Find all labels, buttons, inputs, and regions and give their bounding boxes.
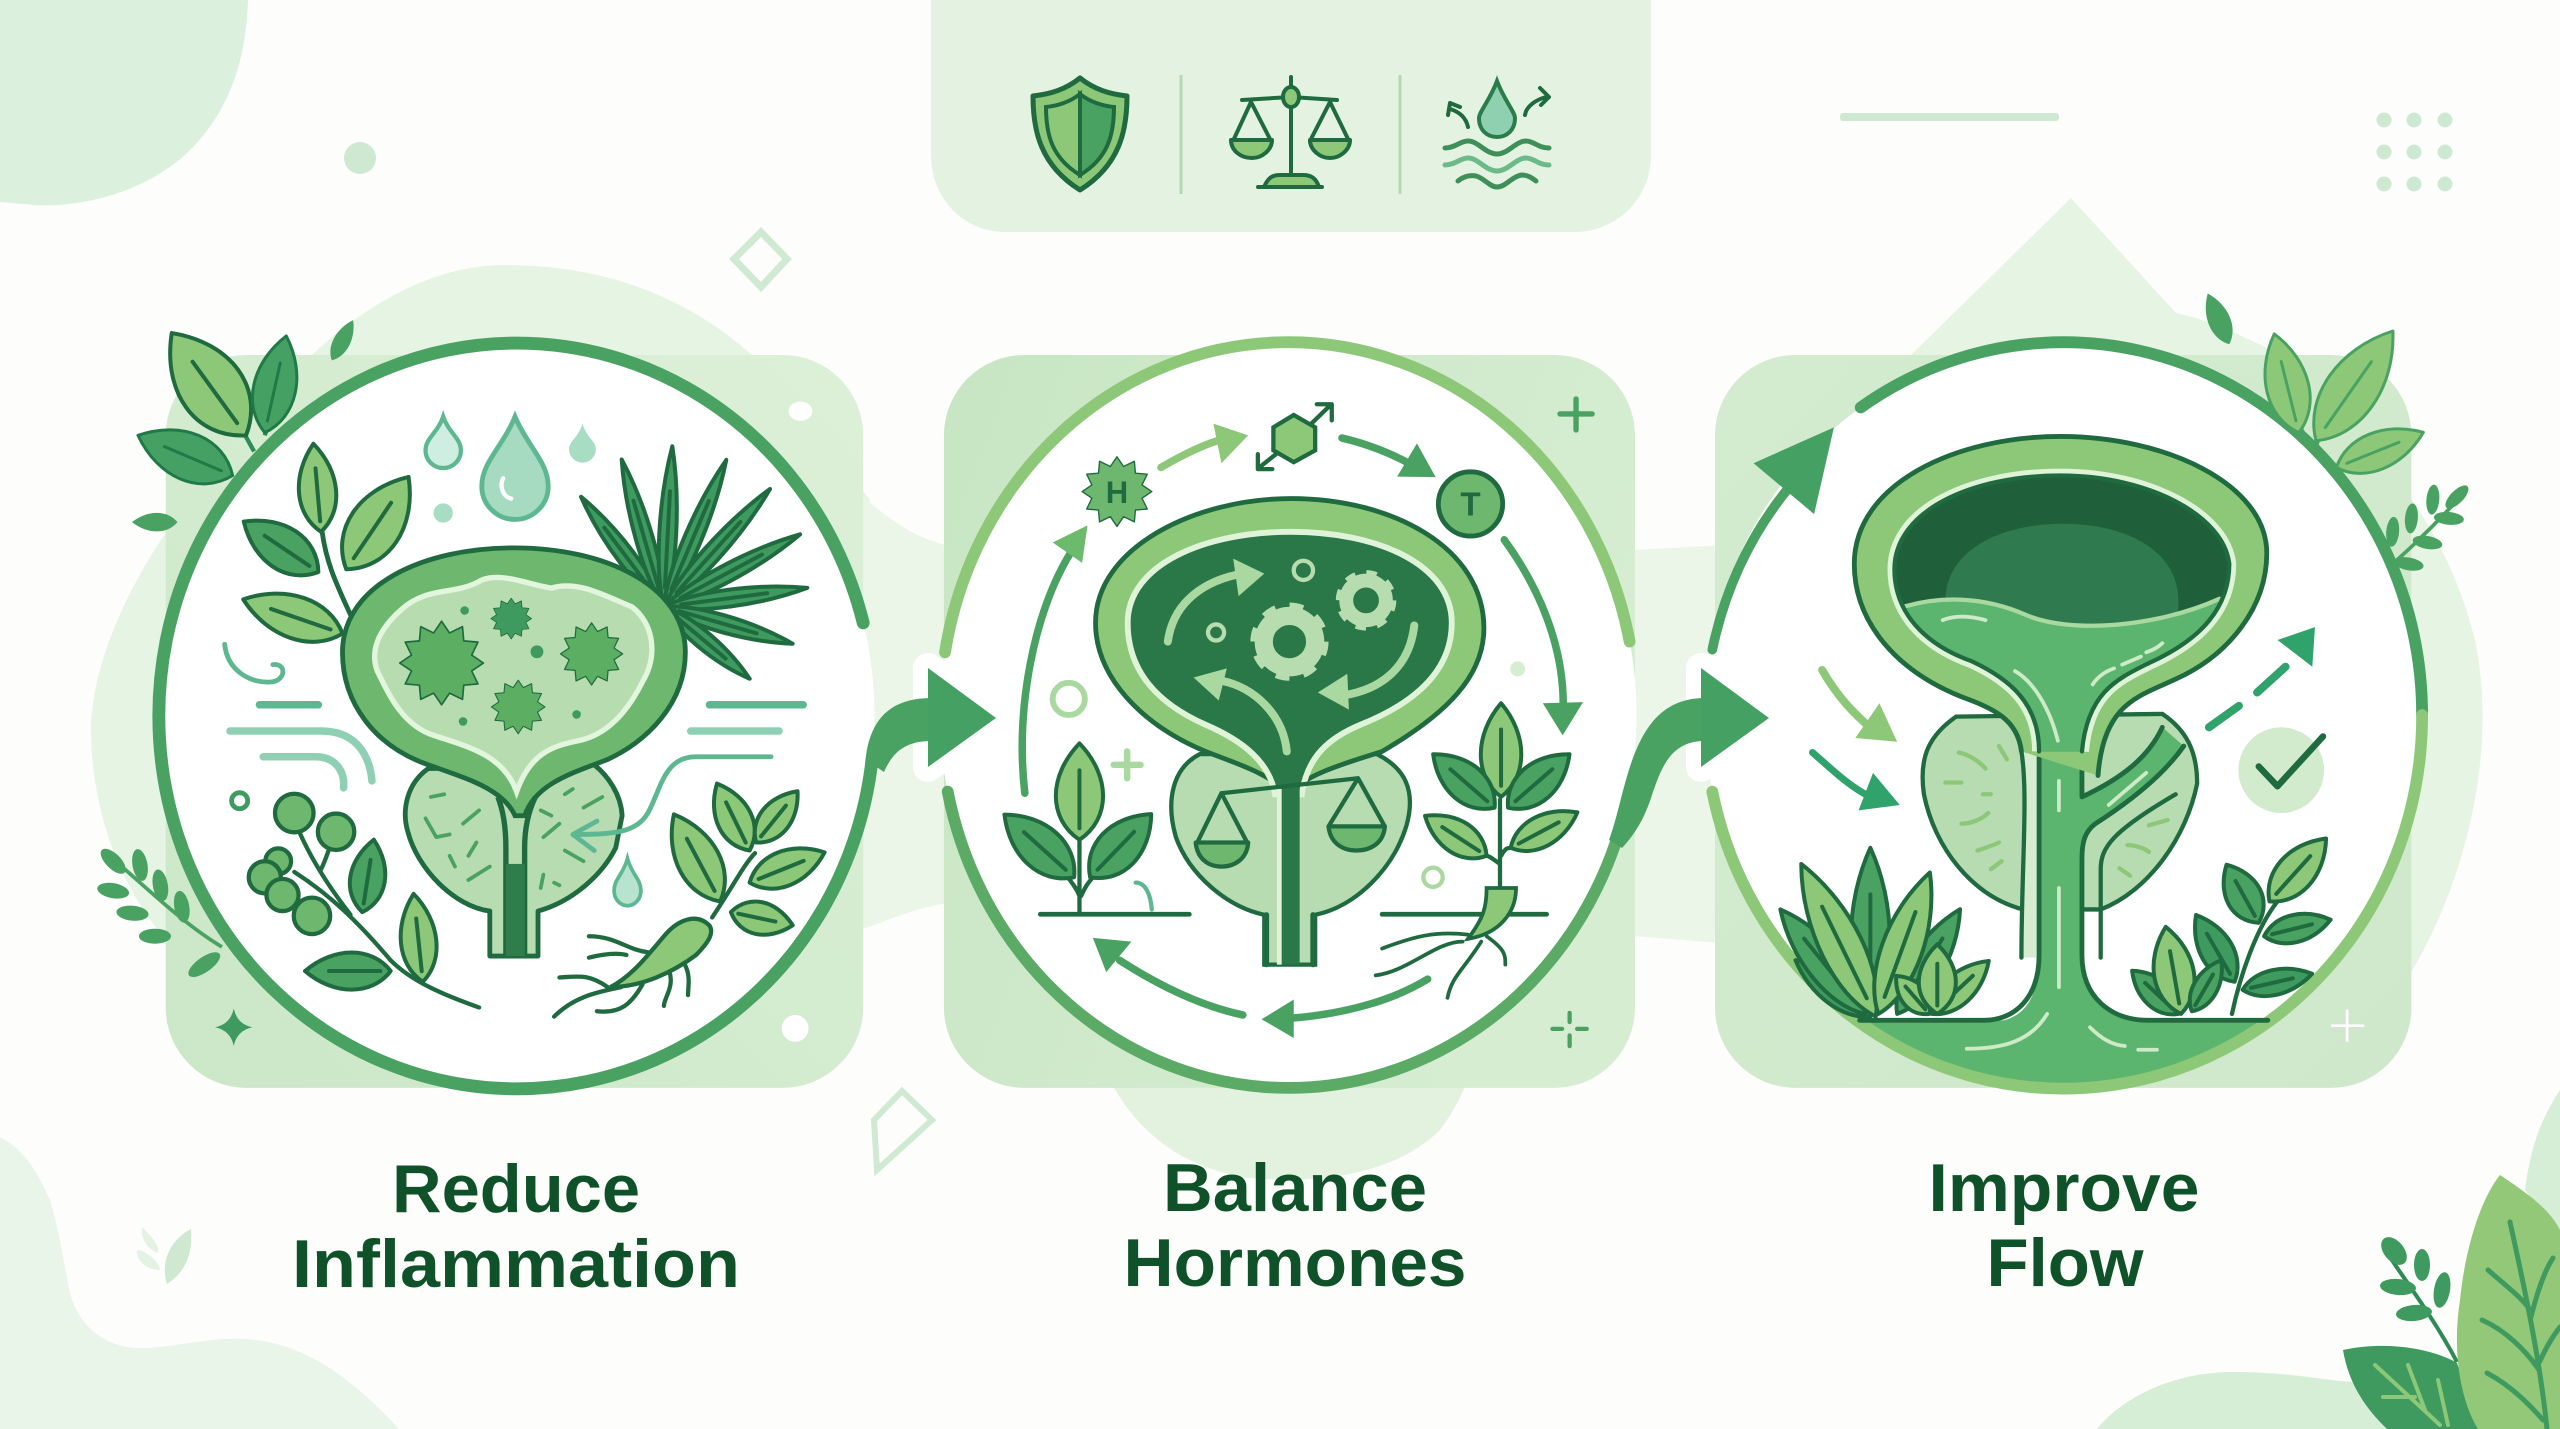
icon: ring — [232, 793, 248, 809]
icon: inward arrows — [1812, 670, 1900, 810]
icon: bottom-right corner leaves — [2343, 1175, 2560, 1429]
icon: berries branch — [249, 794, 479, 1007]
panel: balance hormones — [940, 342, 1637, 1088]
heading: balance hormones: Balance — [1163, 1150, 1427, 1226]
icon: urethra — [1266, 789, 1313, 965]
white dots — [782, 402, 812, 1042]
germ dots — [459, 606, 581, 726]
icon: inflamed bladder — [342, 548, 685, 816]
icon: prostate — [1923, 714, 2197, 909]
background: line — [1840, 113, 2059, 121]
icon: saw palmetto — [574, 446, 808, 685]
circular arc bottom — [948, 792, 1616, 1088]
icon: plants right — [2123, 826, 2340, 1024]
panel background card — [166, 355, 863, 1088]
background: bottom-right blobs — [2097, 1090, 2560, 1429]
circular arc — [159, 343, 872, 1089]
icon: hormone H badge: H — [1106, 475, 1128, 510]
icon: balance scale — [1231, 77, 1350, 187]
icon: prostate with scale base — [1171, 754, 1410, 965]
heading: reduce inflammation — [292, 1151, 740, 1302]
circular arc lower — [1712, 715, 2422, 1089]
background: top-left blob — [0, 0, 248, 205]
background: dot — [344, 142, 376, 174]
heading: reduce inflammation: Inflammation — [292, 1226, 740, 1302]
icon: shield — [1033, 78, 1127, 190]
background: diamond outline top — [734, 232, 787, 287]
icon: hormone H badge — [1082, 457, 1152, 526]
icon: bladder partially filled — [1854, 436, 2267, 776]
icon: seedling left — [990, 743, 1189, 914]
icon: urethra — [498, 797, 535, 956]
white circle — [159, 342, 874, 1088]
icon: outer sprig right — [2385, 482, 2472, 573]
icon: molecule hexagon — [1258, 404, 1332, 469]
icon: dashed rising arrow — [2209, 627, 2315, 727]
icon: small pale leaf bottom-left — [137, 1227, 191, 1284]
heading: balance hormones: Hormones — [1124, 1225, 1466, 1301]
background: blob behind left panel — [91, 265, 900, 970]
icon: plus — [1560, 399, 1592, 430]
icon: plants left — [1767, 848, 1999, 1028]
panel: top icon banner — [931, 0, 1651, 232]
heading: improve flow: Flow — [1986, 1225, 2145, 1301]
circular arc top right — [1861, 342, 2422, 715]
panel: reduce inflammation — [96, 314, 874, 1089]
arrow: reduce to balance — [865, 668, 996, 772]
heading: reduce inflammation: Reduce — [392, 1151, 640, 1227]
hormone cycle arrows — [1022, 424, 1583, 1038]
icon: outer leaves top right — [2197, 289, 2430, 485]
arc arrow — [1712, 427, 1834, 650]
background: diamond outline bottom — [874, 1091, 932, 1170]
background: bottom-left blob — [0, 1137, 399, 1429]
icon: white plus — [2331, 1010, 2364, 1042]
white circle — [1705, 342, 2422, 1088]
icon: ginseng root — [554, 776, 831, 1017]
icon: leafy branch — [232, 442, 430, 654]
heading: improve flow — [1928, 1150, 2200, 1301]
background: wave band — [860, 494, 1720, 943]
arrow: balance to improve — [1609, 668, 1769, 848]
icon: hormone T badge: T — [1460, 487, 1481, 524]
icon: inflamed prostate lobes — [405, 765, 622, 956]
icon: urethra flow — [1860, 679, 2268, 1022]
panel: improve flow — [1705, 289, 2472, 1089]
icon: outer sprig bottom-left — [96, 845, 224, 982]
icon: wind lines left — [225, 644, 372, 788]
icon: check badge — [2238, 727, 2324, 813]
white circle — [940, 342, 1637, 1088]
panel background card — [1715, 355, 2411, 1088]
background: triangle and blob behind right panel — [1800, 198, 2483, 990]
icon: water drops — [426, 417, 641, 906]
arrows inside bladder — [1168, 559, 1414, 751]
gears — [1208, 561, 1393, 676]
background: dot grid — [2376, 112, 2452, 192]
decorative dot — [1510, 661, 1525, 676]
icon: wind lines and arrow right — [573, 705, 803, 851]
icon: outer leaves top-left — [129, 314, 361, 531]
circular arc top — [945, 342, 1630, 652]
background: blob under centre panel — [1100, 1060, 1475, 1180]
icon: ring and plus — [1053, 683, 1443, 887]
heading: balance hormones — [1124, 1150, 1466, 1301]
icon: ginseng plant right — [1376, 703, 1585, 998]
icon: sparkle — [215, 1009, 252, 1046]
panel background card — [944, 355, 1635, 1088]
germs — [400, 598, 623, 734]
icon: balance scale — [1196, 778, 1385, 867]
divider — [1398, 75, 1402, 194]
icon: hormone T badge — [1438, 472, 1503, 536]
flow highlights — [1943, 617, 2162, 1050]
fluid pool — [1857, 1020, 2269, 1088]
heading: improve flow: Improve — [1928, 1150, 2200, 1226]
icon: sparkle cross — [1552, 1013, 1587, 1046]
divider — [1180, 75, 1182, 194]
icon: bladder — [1096, 499, 1484, 794]
icon: drop and waves — [1445, 81, 1549, 187]
